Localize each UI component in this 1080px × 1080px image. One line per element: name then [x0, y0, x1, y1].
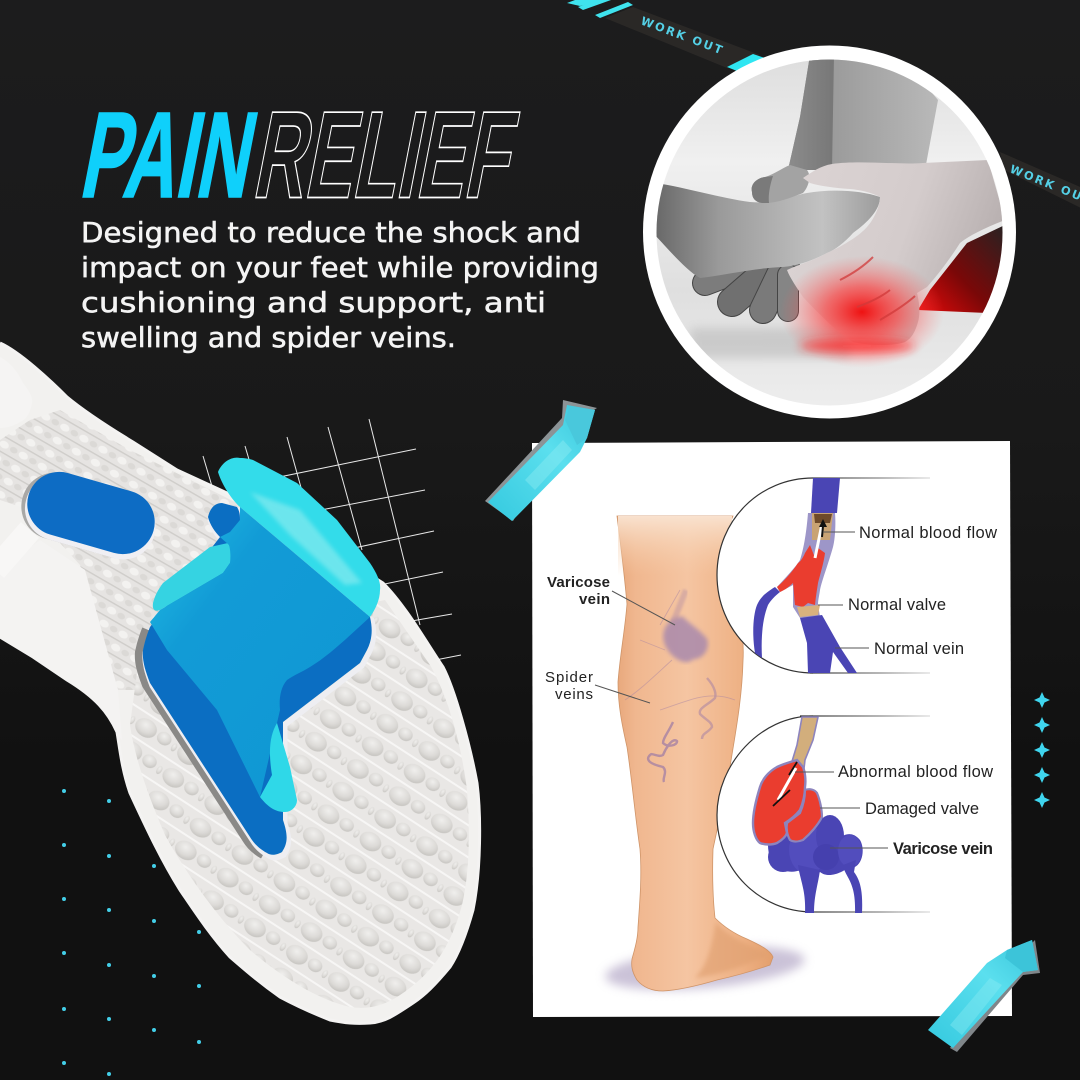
diagram labels: Normal vein: [874, 640, 964, 658]
diagram labels: Varicose: [547, 574, 610, 591]
gel pad: lower lobe: [260, 723, 297, 812]
diagram labels: Normal valve: [848, 596, 946, 614]
gel pad: small oval: [14, 463, 164, 567]
magnifier: normal vein: [717, 478, 930, 673]
gel pad: dark blue base: [143, 503, 372, 855]
tape bottom: [928, 940, 1040, 1052]
diagram labels: vein: [579, 591, 610, 608]
diagram labels: [545, 524, 997, 858]
decorative dots: [62, 789, 201, 1076]
tape top: [485, 400, 597, 521]
title: RELIEF: [246, 86, 528, 224]
diagram labels: Normal blood flow: [859, 524, 997, 542]
description text: Designed to reduce the shock and: [81, 217, 581, 249]
diagram labels: Abnormal blood flow: [838, 763, 993, 781]
diagram labels: veins: [555, 686, 593, 703]
description text: impact on your feet while providing: [81, 252, 599, 284]
gel pad: recess rim: [145, 506, 374, 858]
decorative stars: [1034, 692, 1050, 808]
diagram labels: Damaged valve: [865, 800, 979, 818]
decorative band: work out top: [567, 0, 765, 71]
description text: swelling and spider veins.: [81, 322, 456, 354]
leg illustration: [604, 516, 806, 997]
grid lines behind insole: [203, 419, 461, 663]
title: PAIN: [73, 88, 267, 224]
title: [73, 86, 528, 224]
gel pad: recess shadow: [139, 629, 263, 855]
veins on leg: [625, 590, 735, 782]
varicose vein diagram card: [532, 441, 1012, 1017]
description text: [81, 217, 599, 354]
diagram labels: Varicose vein: [893, 840, 993, 858]
magnifier: varicose vein: [717, 716, 930, 913]
gel pad: left lobe: [153, 543, 231, 611]
decorative band: work out top: WORK OUT: [639, 14, 726, 58]
diagram labels: Spider: [545, 669, 593, 686]
gel pad: crescent highlight: [250, 492, 362, 585]
gel pad: main translucent body: [150, 507, 370, 797]
leader lines: [595, 532, 888, 848]
insole with gel pads: [0, 340, 500, 1040]
gel pad: translucent crescent: [218, 458, 380, 617]
photo circle: foot pain: [643, 46, 1016, 420]
description text: cushioning and support, anti: [81, 287, 546, 319]
